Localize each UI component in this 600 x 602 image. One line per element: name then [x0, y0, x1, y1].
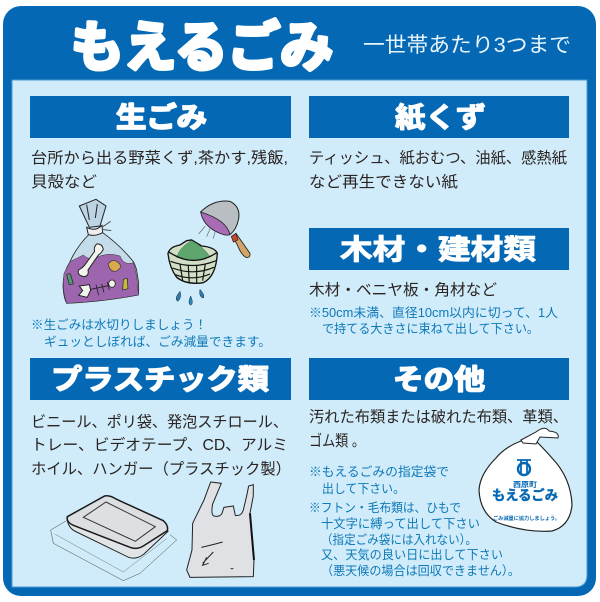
panel: wood and building materials [309, 228, 569, 336]
heading: other: その他 [393, 364, 485, 395]
note: drain kitchen waste: ギュッとしぼれば、ごみ減量できます。 [44, 334, 271, 349]
heading: wood: 木材・建材類 [340, 234, 536, 265]
heading: wood [309, 228, 569, 270]
icon: designated garbage bag [479, 428, 572, 531]
note: designated bag and bedding: 又、天気の良い日に出して下さい [321, 547, 503, 562]
note: designated bag and bedding [309, 464, 520, 578]
subtitle: limit per household: 一世帯あたり3つまで [363, 34, 571, 57]
note: wood size limit: ※50cm未満、直径10cm以内に切って、1人 [309, 305, 559, 320]
text: other description [309, 408, 568, 450]
note: designated bag and bedding: （指定ごみ袋には入れない）。 [321, 532, 477, 547]
text: paper waste description: など再生できない紙 [309, 173, 459, 191]
note: designated bag and bedding: ※もえるごみの指定袋で [309, 464, 449, 479]
title: もえるごみ [71, 18, 333, 78]
text: kitchen waste description: 台所から出る野菜くず,茶かす,残飯, [31, 149, 288, 167]
bag label: burnable: もえるごみ [492, 487, 558, 503]
text: paper waste description: ティッシュ、紙おむつ、油紙、感熱紙 [309, 149, 567, 167]
text: kitchen waste description: 貝殻など [31, 173, 98, 191]
heading: kitchen waste [30, 96, 291, 138]
heading: paper waste: 紙くず [395, 102, 486, 133]
note: designated bag and bedding: （悪天候の場合は回収できません）。 [321, 564, 520, 578]
note: drain kitchen waste [31, 317, 271, 349]
bag label: town: 西原町 [513, 480, 538, 489]
heading: paper waste [309, 96, 569, 138]
text: other description: 汚れた布類または破れた布類、革類、 [309, 408, 568, 426]
note: designated bag and bedding: 十文字に縛って出して下さい [321, 517, 480, 531]
note: wood size limit [309, 305, 559, 336]
note: drain kitchen waste: ※生ごみは水切りしましょう！ [31, 317, 207, 332]
heading: plastics [30, 358, 291, 400]
fish bones [79, 285, 91, 297]
bone [78, 244, 103, 277]
text: plastics description: ビニール、ポリ袋、発泡スチロール、 [31, 413, 288, 431]
text: plastics description [31, 413, 291, 478]
text: wood description: 木材・ベニヤ板・角材など [309, 281, 497, 299]
panel: paper waste [309, 96, 569, 191]
text: other description: ゴム類 。 [309, 431, 365, 450]
panel: kitchen waste [30, 96, 291, 349]
icon: plastic bag [187, 482, 254, 577]
heading: other [309, 358, 569, 400]
bag label: reduction message: ごみ減量に協力しましょう。 [493, 514, 560, 522]
scraps [108, 260, 121, 271]
note: designated bag and bedding: ※フトン・毛布類は、ひもで [309, 501, 461, 515]
note: designated bag and bedding: 出して下さい。 [322, 482, 405, 496]
heading: kitchen waste: 生ごみ [116, 101, 207, 133]
note: wood size limit: で持てる大きさに束ねて出して下さい。 [322, 321, 539, 336]
icon: colander and ladle [168, 201, 250, 305]
text: kitchen waste description [31, 149, 288, 191]
bag logo [517, 460, 531, 475]
panel: other [309, 358, 572, 578]
heading: plastics: プラスチック類 [51, 364, 269, 395]
text: plastics description: ホイル、ハンガー（プラスチック製） [31, 460, 291, 478]
icon: foam tray [51, 496, 177, 581]
text: plastics description: トレー、ビデオテープ、CD、アルミ [31, 435, 288, 454]
text: paper waste description [309, 149, 567, 191]
icon: garbage bag [63, 199, 139, 303]
panel: plastics [30, 358, 291, 581]
